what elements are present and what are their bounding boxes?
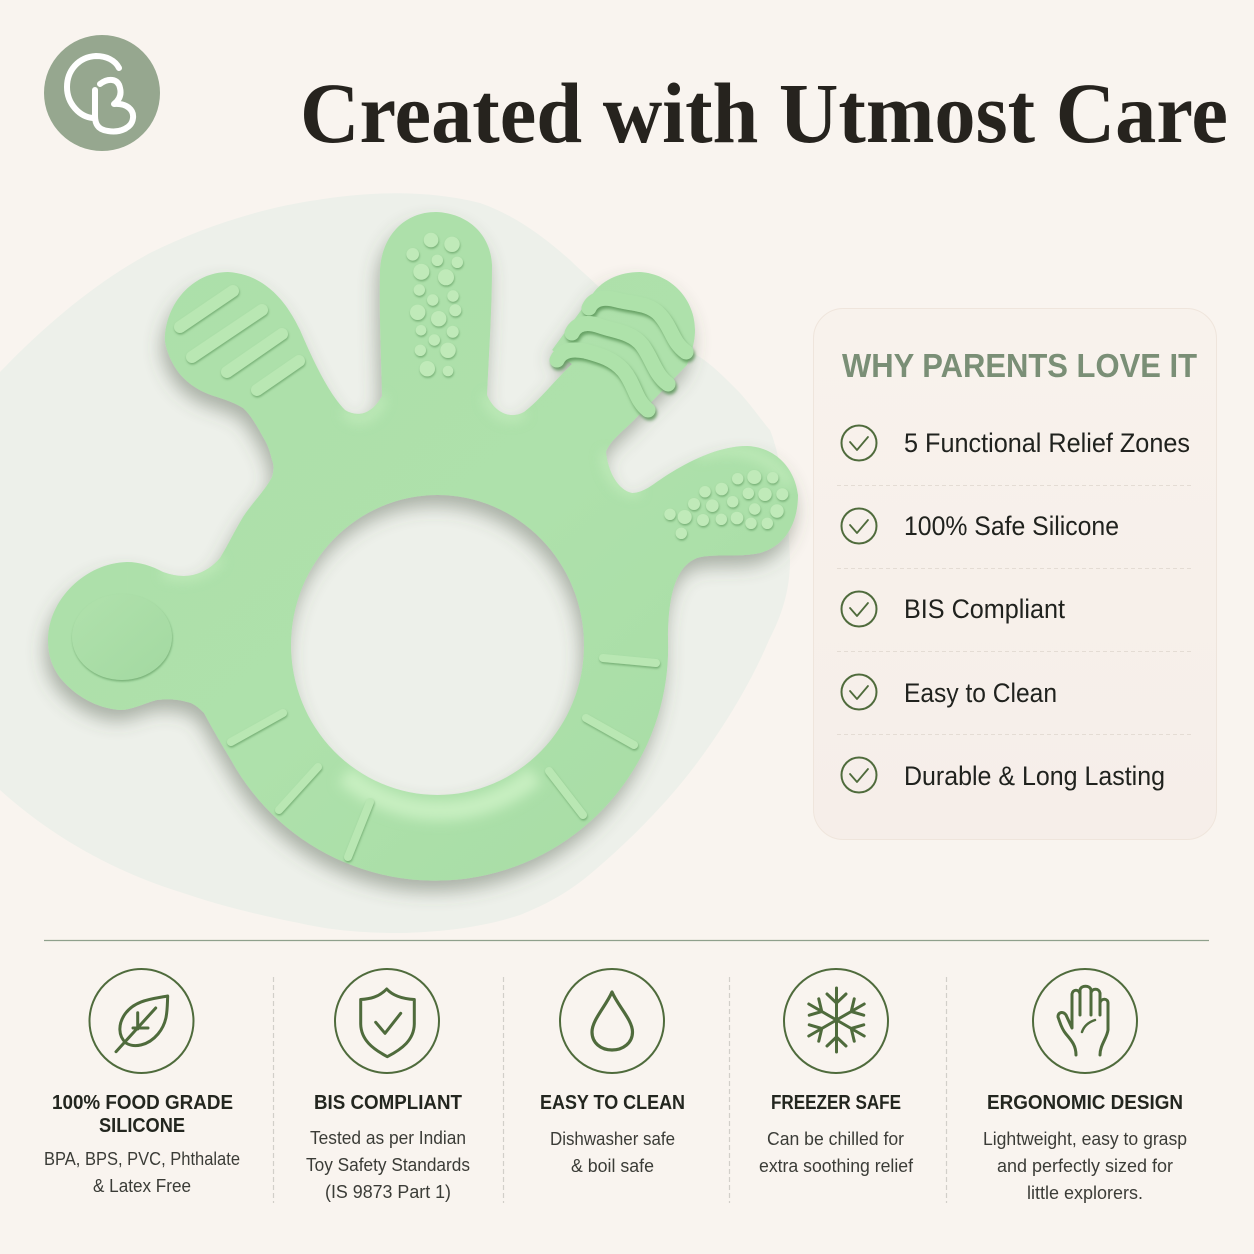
title: Created with Utmost Care <box>300 65 1228 161</box>
text: SILICONE <box>99 1115 185 1137</box>
arm 2 bumps <box>406 233 463 376</box>
ring tick marks <box>231 658 656 857</box>
feature: BIS compliant <box>306 969 470 1202</box>
text: Tested as per Indian <box>310 1128 466 1148</box>
text: EASY TO CLEAN <box>540 1092 685 1114</box>
feature: easy to clean <box>540 969 685 1176</box>
text <box>540 1092 685 1176</box>
icon: droplet <box>560 969 664 1073</box>
text: Can be chilled for <box>767 1129 904 1149</box>
text <box>44 1092 240 1196</box>
item: BIS compliant <box>842 592 1065 626</box>
panel: why parents love it <box>814 308 1216 840</box>
feature: ergonomic design <box>983 969 1187 1203</box>
text: (IS 9873 Part 1) <box>325 1182 451 1202</box>
text: ERGONOMIC DESIGN <box>987 1092 1183 1114</box>
text <box>306 1092 470 1202</box>
item: safe silicone <box>842 508 1119 544</box>
text: & boil safe <box>571 1156 654 1176</box>
text: FREEZER SAFE <box>771 1092 901 1114</box>
teether product illustration <box>48 212 798 881</box>
text: little explorers. <box>1027 1183 1143 1203</box>
item: durable: Durable & Long Lasting <box>904 761 1165 791</box>
text: Lightweight, easy to grasp <box>983 1129 1187 1149</box>
icon: shield <box>335 969 439 1073</box>
feature: freezer safe <box>759 969 914 1176</box>
text: extra soothing relief <box>759 1156 914 1176</box>
item: BIS compliant: BIS Compliant <box>904 594 1065 624</box>
text: Toy Safety Standards <box>306 1155 470 1175</box>
icon: snowflake <box>784 969 888 1073</box>
text: Dishwasher safe <box>550 1129 675 1149</box>
icon: leaf <box>90 969 194 1073</box>
arm 3 wavy ridges <box>557 298 686 410</box>
text: and perfectly sized for <box>997 1156 1173 1176</box>
item: easy to clean: Easy to Clean <box>904 678 1057 708</box>
item: functional relief zones <box>842 426 1190 460</box>
background blob <box>0 193 790 933</box>
item: safe silicone: 100% Safe Silicone <box>904 511 1119 541</box>
panel heading: WHY PARENTS LOVE IT <box>842 347 1197 384</box>
item: functional relief zones: 5 Functional Relief Zones <box>904 428 1190 458</box>
text: 100% FOOD GRADE <box>52 1092 233 1114</box>
teether body <box>48 212 798 881</box>
text <box>759 1092 914 1176</box>
item: easy to clean <box>842 674 1057 710</box>
feature: food grade <box>44 969 240 1196</box>
soft highlights on the body <box>163 395 790 811</box>
text: BIS COMPLIANT <box>314 1092 462 1114</box>
left nub disc <box>72 594 172 680</box>
arm 4 bumps <box>664 470 788 539</box>
icon: hand <box>1033 969 1137 1073</box>
logo <box>44 35 160 151</box>
text: & Latex Free <box>93 1176 191 1196</box>
item: durable <box>842 758 1165 792</box>
text <box>983 1092 1187 1203</box>
arm 1 ridges <box>180 291 299 390</box>
text: BPA, BPS, PVC, Phthalate <box>44 1149 240 1169</box>
